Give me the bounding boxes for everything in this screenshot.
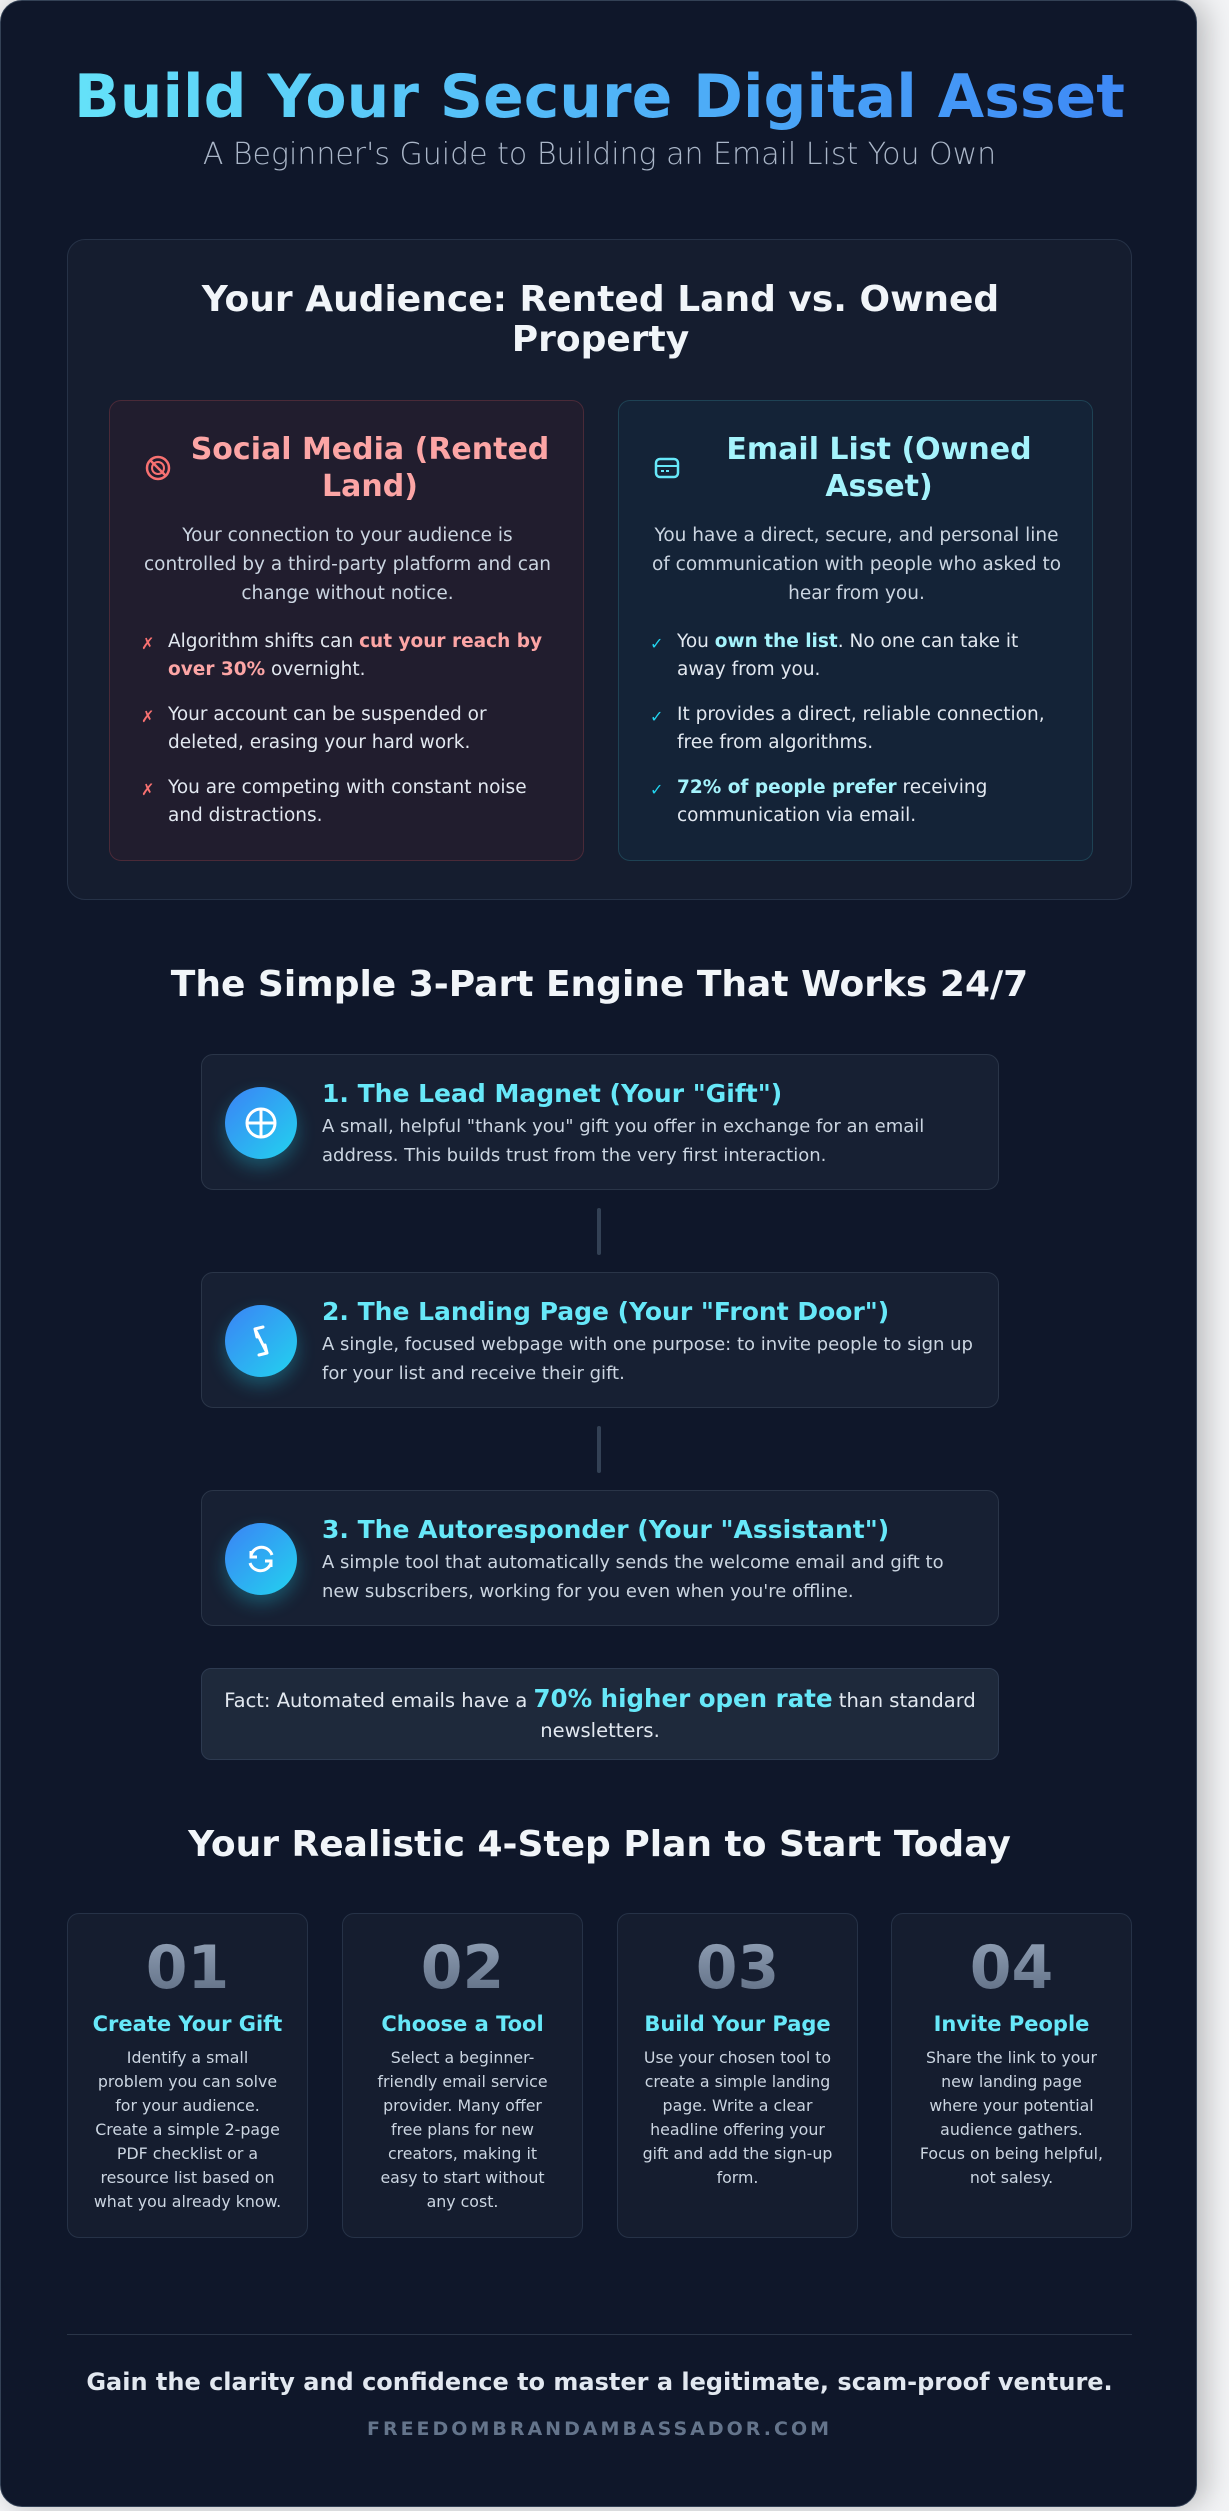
step 3: 3. The Autoresponder (Your "Assistant") <box>322 1515 889 1544</box>
plan step 01: what you already know. <box>94 2192 281 2211</box>
step 3 <box>201 1490 999 1626</box>
icon: magnet <box>225 1087 297 1159</box>
plan step 02: free plans for new <box>391 2120 534 2139</box>
plan step 04: Invite People <box>934 2012 1089 2036</box>
plan step 03: 03 <box>696 1933 779 2003</box>
footer url: FREEDOMBRANDAMBASSADOR.COM <box>367 2418 832 2440</box>
plan step 01 <box>67 1913 308 2238</box>
bullet list: It provides a direct, reliable connection, free from algorithms. <box>677 704 1045 753</box>
icon: refresh <box>225 1523 297 1595</box>
box heading: Social Media (Rented <box>191 432 549 467</box>
plan step 01: Create a simple 2-page <box>95 2120 280 2139</box>
bullet list: Algorithm shifts can cut your reach by over 30% overnight. <box>168 631 542 680</box>
plan step 03: page. Write a clear <box>663 2096 812 2115</box>
step 2: 2. The Landing Page (Your "Front Door") <box>322 1297 889 1326</box>
box heading: Email List (Owned <box>726 432 1032 467</box>
plan step 04: Focus on being helpful, <box>920 2144 1103 2163</box>
step 1 <box>201 1054 999 1190</box>
plan step 01: Create Your Gift <box>93 2012 282 2036</box>
plan step 04: new landing page <box>941 2072 1082 2091</box>
box heading <box>191 432 549 504</box>
plan step 03 <box>617 1913 858 2238</box>
bullet list <box>650 631 1045 826</box>
box heading: Land) <box>322 469 418 504</box>
plan step 04: Share the link to your <box>926 2048 1097 2067</box>
plan step 01: PDF checklist or a <box>117 2144 258 2163</box>
bullet list: You are competing with constant noise and distractions. <box>168 777 527 826</box>
step 1: 1. The Lead Magnet (Your "Gift") <box>322 1079 782 1108</box>
step 2: A single, focused webpage with one purpose: to invite people to sign up <box>322 1334 973 1355</box>
plan step 04: 04 <box>970 1933 1053 2003</box>
section heading: engine: The Simple 3-Part Engine That Works 24/7 <box>171 964 1028 1005</box>
plan step 02: any cost. <box>427 2192 498 2211</box>
bullet list: ✓ <box>650 634 663 653</box>
plan step 04: not salesy. <box>970 2168 1053 2187</box>
panel heading: Property <box>512 319 689 360</box>
plan step 03: gift and add the sign-up <box>643 2144 832 2163</box>
plan step 03: create a simple landing <box>645 2072 830 2091</box>
box: email list <box>618 400 1093 861</box>
box heading: Asset) <box>825 469 933 504</box>
bullet list: You own the list. No one can take it away from you. <box>677 631 1018 680</box>
box heading <box>726 432 1032 504</box>
step 2: for your list and receive their gift. <box>322 1363 625 1384</box>
plan step 02: Choose a Tool <box>381 2012 544 2036</box>
plan step 03: Build Your Page <box>644 2012 831 2036</box>
bullet list: 72% of people prefer receiving communication via email. <box>677 777 987 826</box>
plan step 02: provider. Many offer <box>383 2096 542 2115</box>
closing statement: Gain the clarity and confidence to master a legitimate, scam-proof venture. <box>86 2368 1113 2396</box>
plan step 03: form. <box>717 2168 758 2187</box>
plan step 02: creators, making it <box>388 2144 537 2163</box>
step 3: new subscribers, working for you even when you're offline. <box>322 1581 854 1602</box>
fact callout <box>201 1668 999 1760</box>
subtitle: A Beginner's Guide to Building an Email List You Own <box>203 137 996 172</box>
plan step 02 <box>342 1913 583 2238</box>
plan step 02: 02 <box>421 1933 504 2003</box>
plan step 02: friendly email service <box>377 2072 548 2091</box>
plan step 02: easy to start without <box>380 2168 545 2187</box>
bullet list: ✓ <box>650 707 663 726</box>
step 3: A simple tool that automatically sends the welcome email and gift to <box>322 1552 944 1573</box>
plan step 04: audience gathers. <box>940 2120 1083 2139</box>
plan step 01: 01 <box>146 1933 229 2003</box>
bullet list: ✓ <box>650 780 663 799</box>
title: Build Your Secure Digital Asset <box>74 62 1125 132</box>
icon: blocked <box>146 456 170 480</box>
connector <box>597 1208 601 1255</box>
section heading: plan: Your Realistic 4-Step Plan to Start Today <box>188 1824 1011 1865</box>
step 1: address. This builds trust from the very first interaction. <box>322 1145 826 1166</box>
panel heading: Your Audience: Rented Land vs. Owned <box>202 279 999 320</box>
bullet list: ✗ <box>141 780 154 799</box>
plan step 01: for your audience. <box>115 2096 260 2115</box>
step 1: A small, helpful "thank you" gift you offer in exchange for an email <box>322 1116 924 1137</box>
bullet list: ✗ <box>141 707 154 726</box>
plan step 01: problem you can solve <box>98 2072 277 2091</box>
box: social media <box>109 400 584 861</box>
plan step 04: where your potential <box>929 2096 1094 2115</box>
icon: door <box>225 1305 297 1377</box>
plan step 03: headline offering your <box>650 2120 825 2139</box>
plan step 04 <box>891 1913 1132 2238</box>
bullet list <box>141 631 542 826</box>
icon: card <box>654 458 680 478</box>
bullet list: ✗ <box>141 634 154 653</box>
panel heading <box>201 279 999 360</box>
description: Your connection to your audience is controlled by a third-party platform and can change without notice. <box>144 525 551 604</box>
plan step 01: Identify a small <box>127 2048 248 2067</box>
bullet list: Your account can be suspended or deleted, erasing your hard work. <box>168 704 487 753</box>
fact callout: Fact: Automated emails have a 70% higher open rate than standard newsletters. <box>224 1684 976 1742</box>
panel: rented vs owned <box>67 239 1132 900</box>
step 2 <box>201 1272 999 1408</box>
plan step 01: resource list based on <box>101 2168 274 2187</box>
connector <box>597 1426 601 1473</box>
description: You have a direct, secure, and personal line of communication with people who asked to hear from you. <box>652 525 1061 604</box>
plan step 03: Use your chosen tool to <box>644 2048 831 2067</box>
plan step 02: Select a beginner- <box>391 2048 534 2067</box>
